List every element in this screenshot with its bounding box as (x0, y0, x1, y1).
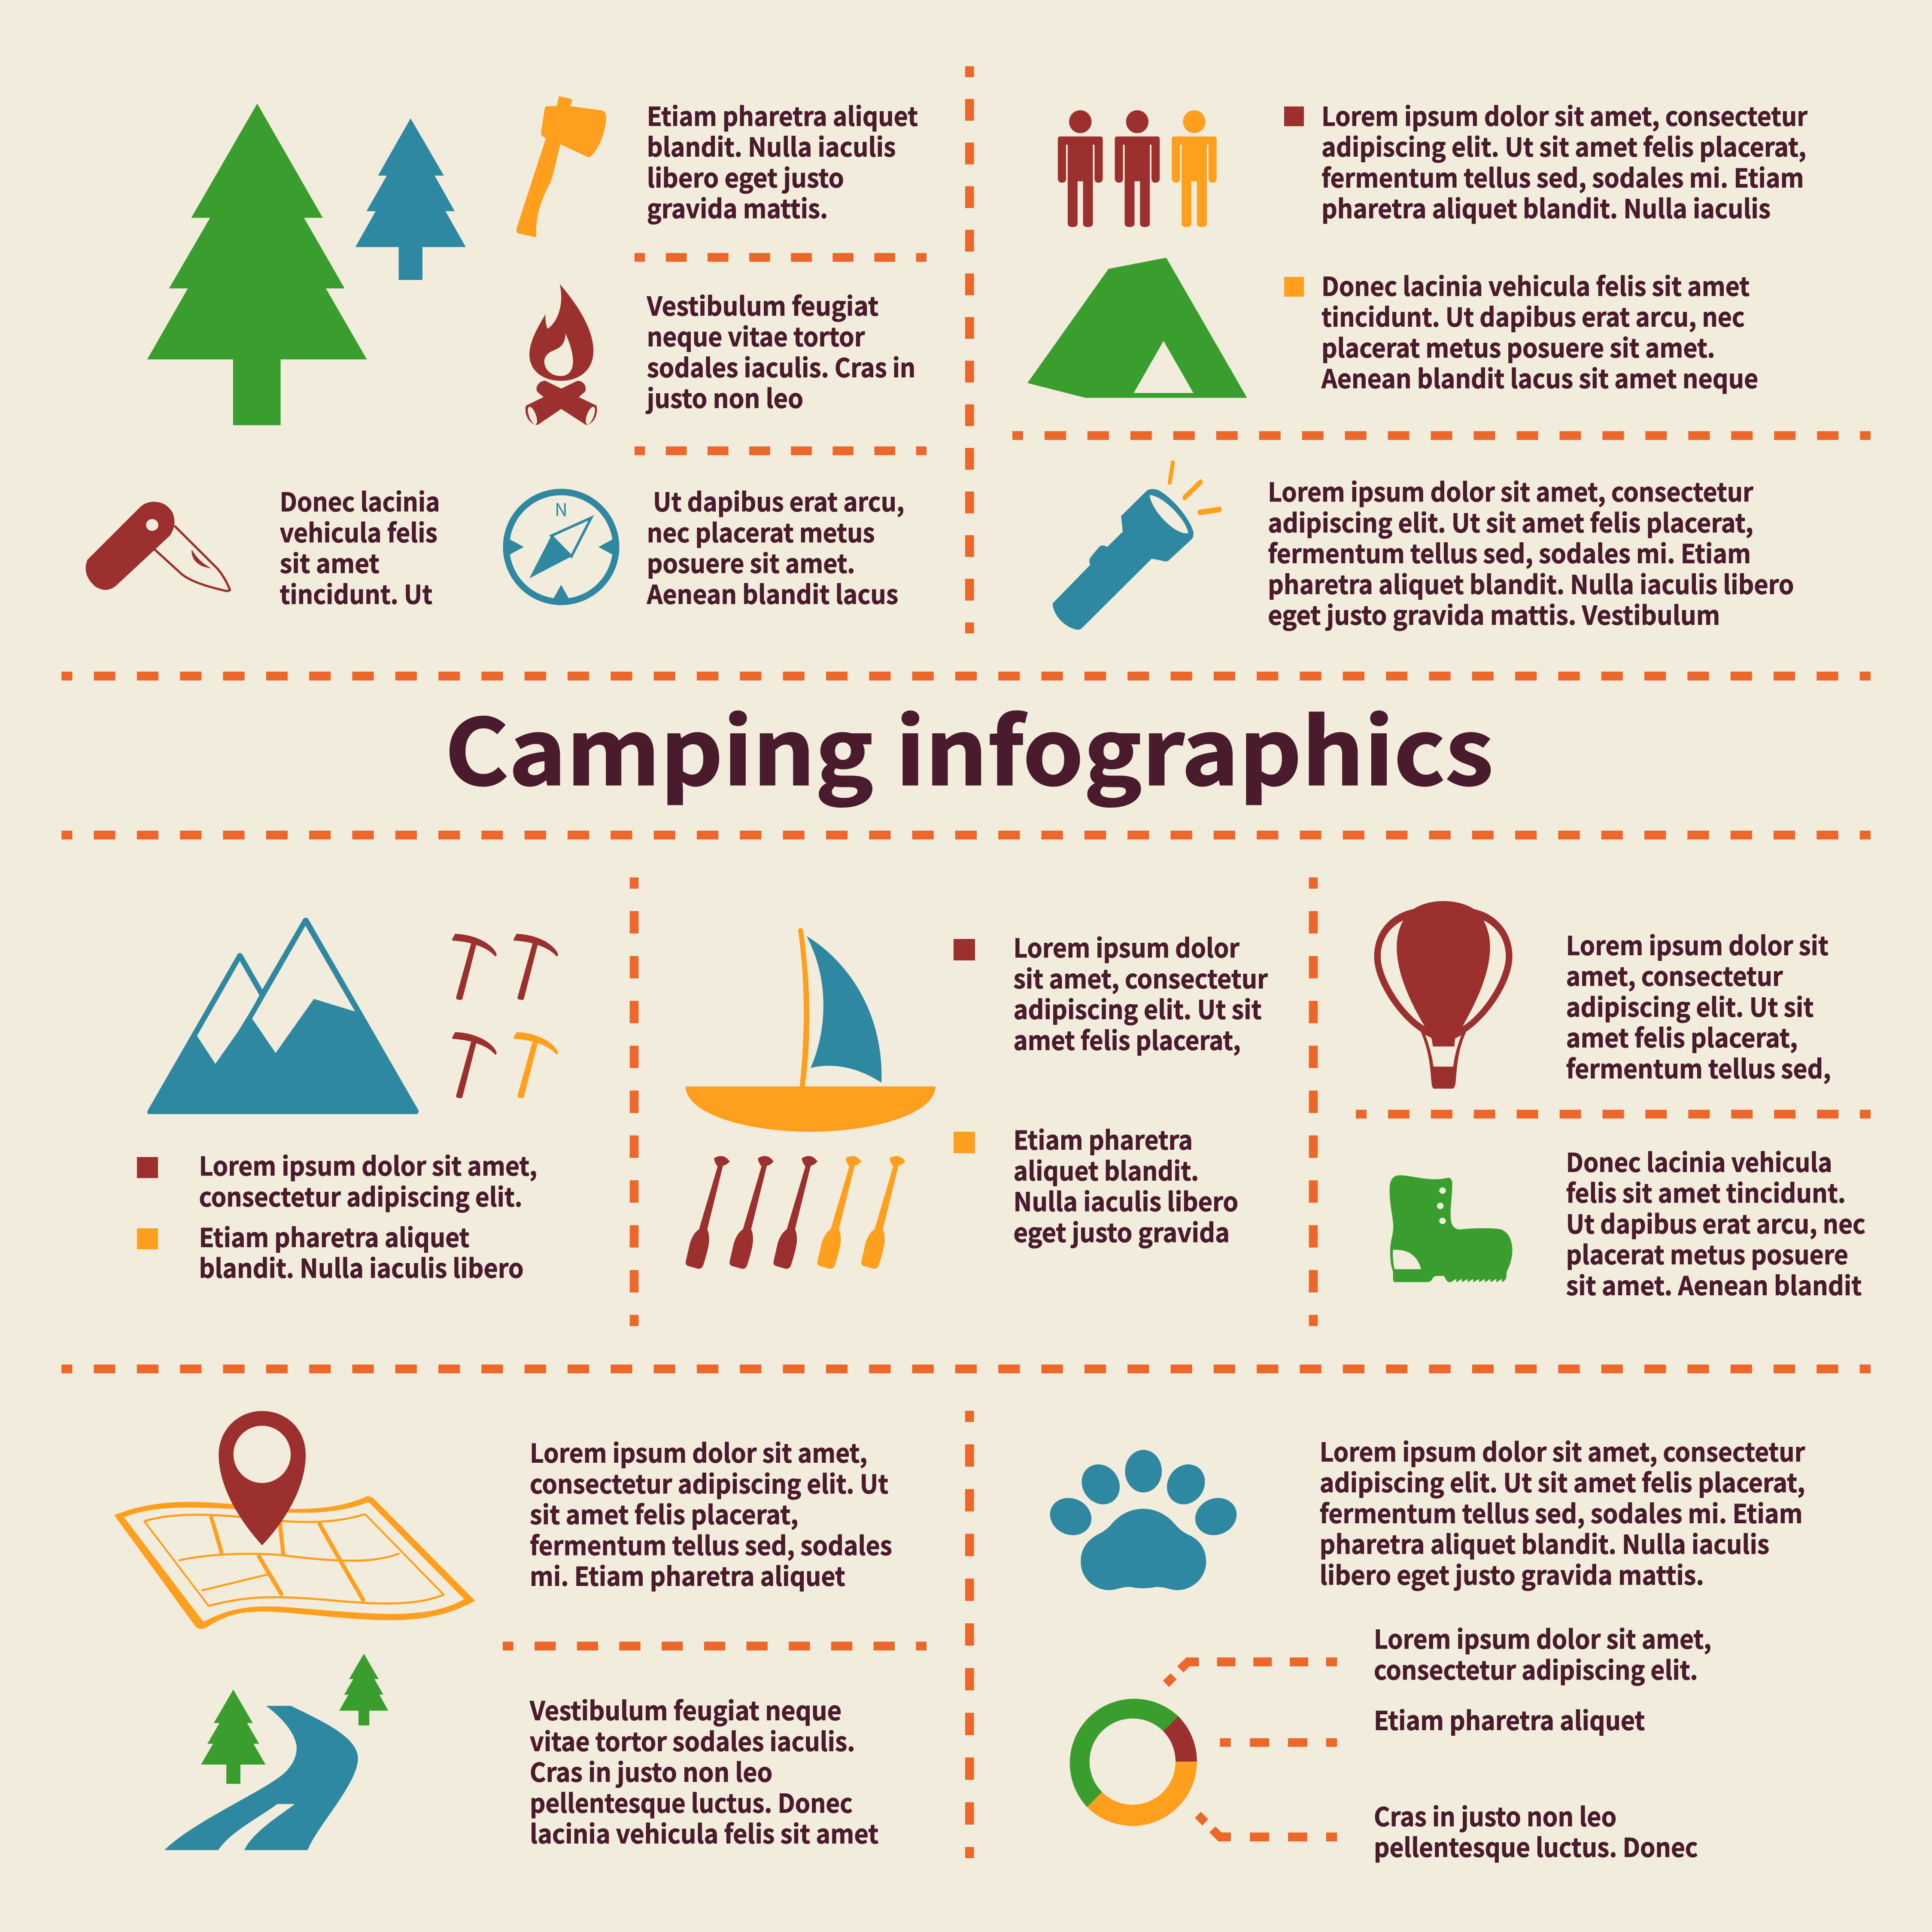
text: paw (1320, 1432, 1805, 1592)
text: people: adipiscing elit. Ut sit amet felis placerat, (1321, 127, 1806, 164)
text: balloon: adipiscing elit. Ut sit (1566, 987, 1814, 1024)
text: flashlight: fermentum tellus sed, sodales mi. Etiam (1268, 534, 1751, 571)
text: boat second (1013, 1120, 1238, 1250)
legend square: orange (1284, 277, 1304, 297)
text: chart label three: Cras in justo non leo (1374, 1796, 1616, 1834)
text: campfire (645, 286, 915, 416)
text: balloon: amet felis placerat, (1566, 1018, 1798, 1055)
icon: flashlight (1053, 463, 1220, 630)
icon: campfire (526, 284, 597, 425)
icon: small blue tree (355, 118, 466, 280)
text: boot: placerat metus posuere (1566, 1235, 1848, 1272)
icon: mountains (147, 917, 419, 1114)
text: tent: tincidunt. Ut dapibus erat arcu, nec (1321, 297, 1745, 334)
text: knife (279, 482, 440, 611)
text: river: pellentesque luctus. Donec (530, 1783, 853, 1820)
text: axe: Etiam pharetra aliquet (647, 96, 918, 134)
text: people: fermentum tellus sed, sodales mi. Etiam (1321, 158, 1804, 195)
text: compass: nec placerat metus (647, 513, 875, 550)
text: knife: vehicula felis (279, 513, 437, 550)
icon: ice axes (452, 934, 558, 1098)
text: mountains second: Etiam pharetra aliquet (199, 1217, 469, 1255)
text: boot: felis sit amet tincidunt. (1566, 1173, 1846, 1210)
text: river: vitae tortor sodales iaculis. (530, 1721, 855, 1759)
legend square: red (137, 1157, 158, 1178)
panel: balloon and boot (1374, 901, 1865, 1303)
text: chart label one: Lorem ipsum dolor sit amet, (1374, 1619, 1711, 1656)
text: map: Lorem ipsum dolor sit amet, (530, 1433, 867, 1470)
icon: compass (506, 492, 616, 602)
panel: mountains (137, 917, 558, 1285)
text: knife: Donec lacinia (279, 482, 440, 519)
text: chart label one: consectetur adipiscing elit. (1374, 1650, 1698, 1687)
text: tent: Aenean blandit lacus sit amet neque (1321, 358, 1758, 396)
text: campfire: sodales iaculis. Cras in (647, 347, 915, 385)
text: boat first: adipiscing elit. Ut sit (1013, 990, 1262, 1027)
panel: top left (86, 96, 918, 611)
text: river: lacinia vehicula felis sit amet (530, 1814, 878, 1851)
icon: compass: N (555, 495, 568, 521)
title: Camping infographics (445, 680, 1493, 811)
text: balloon: amet, consectetur (1566, 956, 1783, 993)
text: chart label one (1374, 1619, 1711, 1687)
legend square: orange (954, 1132, 975, 1153)
text: axe (647, 96, 918, 226)
text: boat second: aliquet blandit. (1013, 1151, 1199, 1188)
icon: large green tree (147, 103, 367, 425)
panel: boat (686, 928, 1268, 1269)
donut chart (1070, 1699, 1197, 1826)
text: tent: Donec lacinia vehicula felis sit amet (1321, 266, 1750, 304)
text: axe: gravida mattis. (647, 188, 828, 226)
text: compass: Ut dapibus erat arcu, (653, 482, 905, 519)
text: map: consectetur adipiscing elit. Ut (530, 1464, 888, 1501)
text: river (529, 1691, 878, 1851)
text: people: Lorem ipsum dolor sit amet, consectetur (1321, 96, 1808, 134)
text: people (1321, 96, 1808, 226)
text: balloon (1566, 925, 1831, 1086)
text: mountains first (199, 1146, 537, 1214)
text: mountains second (199, 1217, 524, 1285)
icon: paw print (1048, 1450, 1239, 1590)
text: boot: Donec lacinia vehicula (1566, 1142, 1832, 1179)
text: campfire: Vestibulum feugiat (647, 286, 878, 323)
text: boot (1566, 1142, 1865, 1303)
text: river: Vestibulum feugiat neque (529, 1691, 841, 1728)
text: flashlight (1268, 472, 1794, 632)
text: chart label three (1374, 1796, 1698, 1865)
text: tent: placerat metus posuere sit amet. (1321, 328, 1715, 365)
text: boot: Ut dapibus erat arcu, nec (1566, 1204, 1865, 1241)
panel: paw and donut chart (1048, 1432, 1805, 1865)
text: axe: blandit. Nulla iaculis (647, 127, 896, 164)
legend square: red (1284, 106, 1304, 126)
text: paw: fermentum tellus sed, sodales mi. Etiam (1320, 1493, 1803, 1531)
text: boat second: Etiam pharetra (1013, 1120, 1193, 1157)
text: paw: adipiscing elit. Ut sit amet felis placerat, (1320, 1463, 1805, 1500)
text: mountains first: Lorem ipsum dolor sit amet, (199, 1146, 537, 1183)
text: balloon: Lorem ipsum dolor sit (1566, 925, 1829, 963)
text: map: fermentum tellus sed, sodales (530, 1525, 892, 1563)
icon: paddles (686, 1156, 905, 1269)
icon: three people (1058, 110, 1217, 227)
text: knife: sit amet (279, 544, 380, 581)
text: chart label two: Etiam pharetra aliquet (1374, 1700, 1645, 1738)
icon: axe (516, 96, 606, 237)
icon: map with pin (114, 1411, 475, 1629)
legend square: red (954, 939, 975, 960)
text: balloon: fermentum tellus sed, (1566, 1048, 1831, 1086)
text: map: mi. Etiam pharetra aliquet (530, 1556, 845, 1594)
icon: sailboat (686, 928, 936, 1132)
icon: river and trees (164, 1654, 388, 1850)
text: campfire: justo non leo (645, 378, 803, 416)
text: flashlight: eget justo gravida mattis. Vestibulum (1268, 595, 1720, 632)
text: boat second: Nulla iaculis libero (1013, 1182, 1238, 1219)
text: compass: posuere sit amet. (647, 544, 855, 581)
panel: map and river (114, 1411, 892, 1851)
text: axe: libero eget justo (647, 158, 844, 195)
text: boat first: amet felis placerat, (1013, 1020, 1241, 1057)
text: flashlight: Lorem ipsum dolor sit amet, consectetur (1268, 472, 1754, 509)
text: map (530, 1433, 892, 1594)
icon: hiking boot (1390, 1176, 1513, 1282)
text: campfire: neque vitae tortor (647, 317, 865, 354)
icon: pocket knife (86, 502, 230, 591)
leader lines (1163, 1657, 1337, 1841)
text: boat first: Lorem ipsum dolor (1013, 928, 1240, 965)
text: knife: tincidunt. Ut (279, 574, 432, 611)
text: compass: Aenean blandit lacus (647, 574, 898, 611)
icon: tent (1027, 258, 1247, 398)
text: boat first (1013, 928, 1268, 1057)
panel: top right (1027, 96, 1808, 632)
text: mountains second: blandit. Nulla iaculis libero (199, 1248, 524, 1285)
text: map: sit amet felis placerat, (530, 1495, 799, 1532)
text: chart label three: pellentesque luctus. Donec (1374, 1827, 1698, 1865)
text: paw: pharetra aliquet blandit. Nulla iaculis (1320, 1524, 1769, 1561)
legend square: orange (137, 1228, 158, 1249)
text: mountains first: consectetur adipiscing elit. (199, 1177, 522, 1214)
text: flashlight: pharetra aliquet blandit. Nulla iaculis libero (1268, 564, 1794, 601)
text: paw: libero eget justo gravida mattis. (1320, 1555, 1704, 1592)
text: boat second: eget justo gravida (1013, 1212, 1230, 1250)
text: people: pharetra aliquet blandit. Nulla iaculis (1321, 188, 1771, 226)
text: paw: Lorem ipsum dolor sit amet, consectetur (1320, 1432, 1805, 1469)
text: river: Cras in justo non leo (530, 1752, 772, 1789)
text: boot: sit amet. Aenean blandit (1566, 1265, 1862, 1303)
text: tent (1321, 266, 1758, 396)
icon: hot air balloon (1374, 901, 1513, 1089)
text: boat first: sit amet, consectetur (1013, 959, 1268, 996)
text: flashlight: adipiscing elit. Ut sit amet felis placerat, (1268, 503, 1753, 540)
text: compass (647, 482, 905, 611)
